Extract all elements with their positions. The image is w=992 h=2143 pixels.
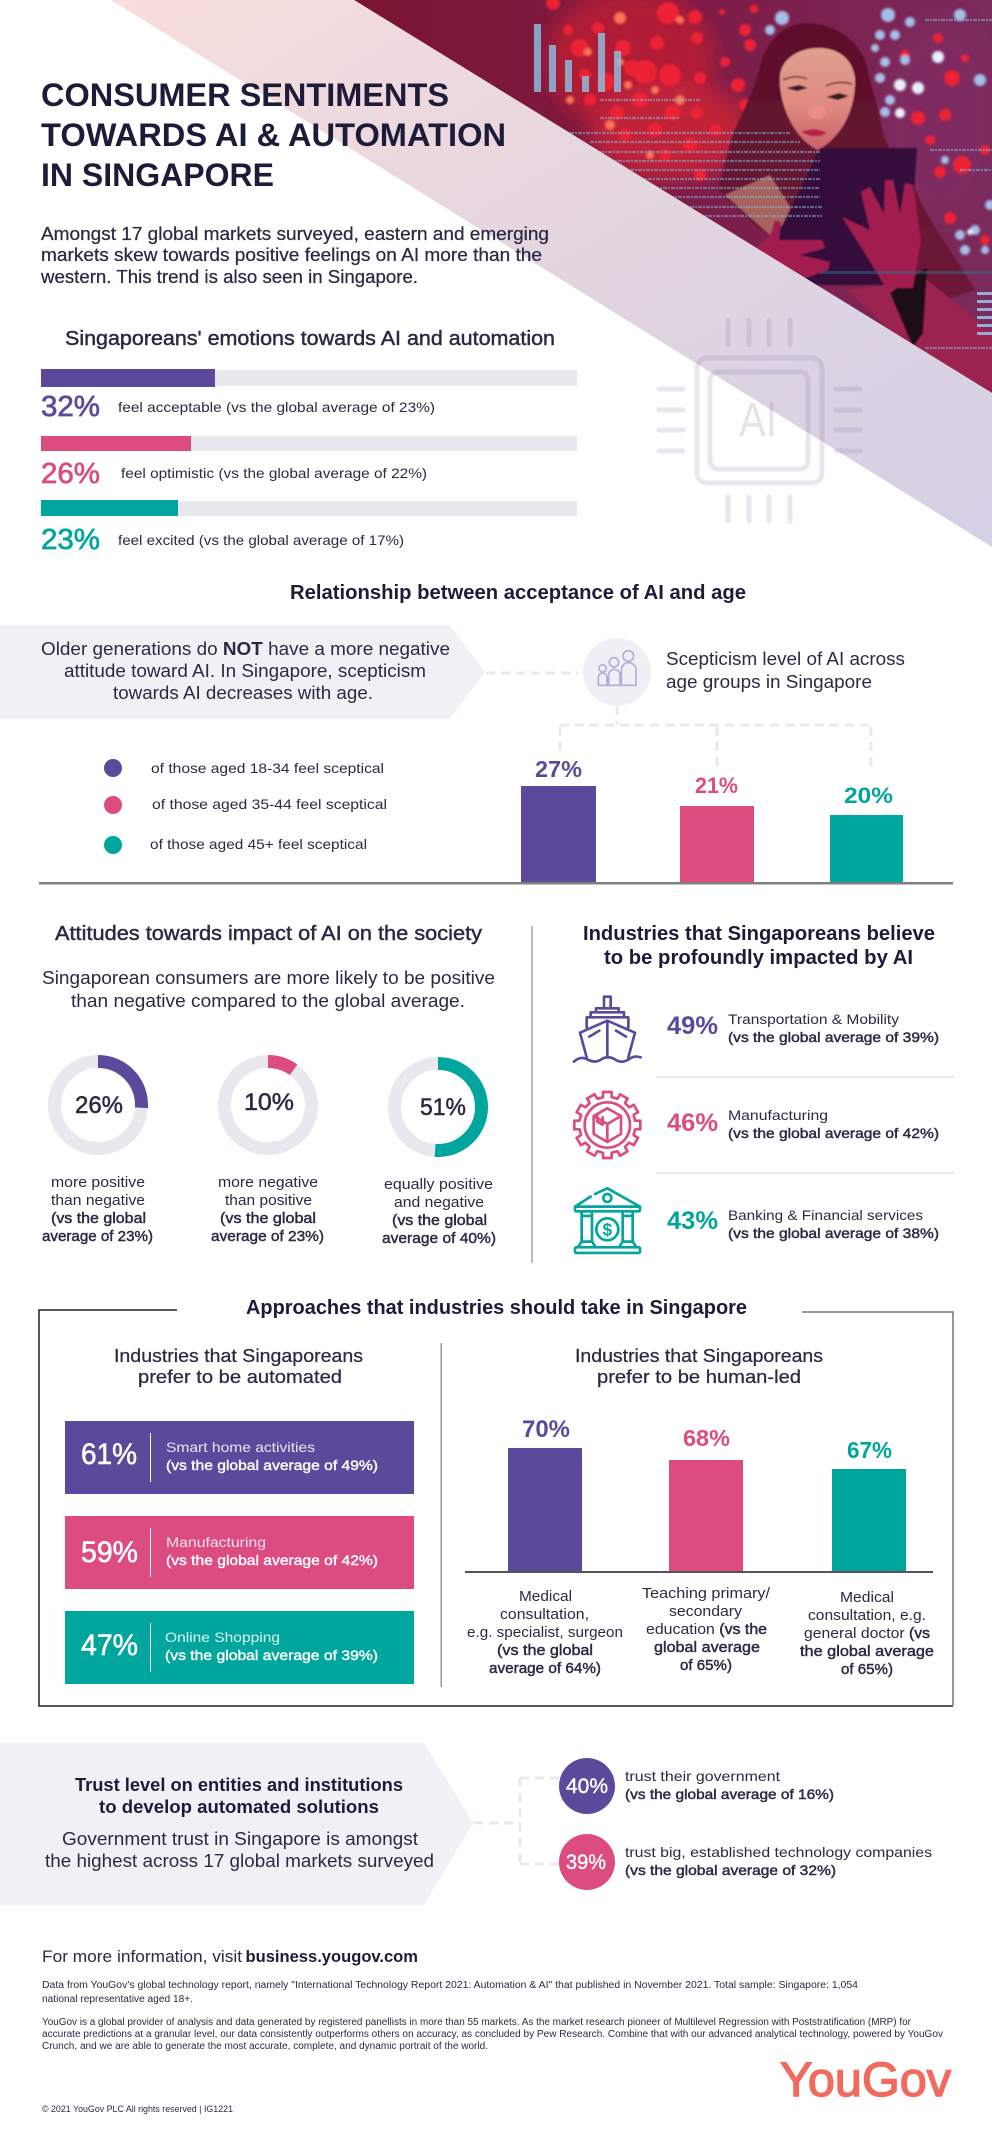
stat: trust tech companies 39%: trust big, established technology companies [625,1844,932,1860]
bar chart: scepticism by age: 20% [844,783,893,808]
donut: 51% equally positive and negative [382,1064,496,1247]
woman: hair [718,23,975,300]
stat: manufacturing 46%: Manufacturing [728,1107,828,1123]
panel: older generations callout arrow: towards AI decreases with age. [113,683,373,703]
woman: face [780,48,855,150]
card: online shopping 47%: Online Shopping [165,1629,280,1645]
donut: 26% more positive: average of 23%) [42,1228,153,1245]
heading: attitudes: Attitudes towards impact of AI on the society [55,923,482,945]
caption: teaching: of 65%) [680,1657,732,1674]
caption: general doctor [800,1589,934,1678]
text: data source notes: accurate predictions at a granular level, our data consistently outperforms others on accuracy, as concluded by Pew Research. Combine that with our advanced analytical technology, powered by YouGov [42,2029,943,2040]
panel: trust level callout arrow: Trust level on entities and institutions [75,1775,403,1795]
card: online shopping 47% [65,1611,414,1684]
stat: trust tech companies 39%: 39% [566,1851,606,1874]
caption: medical specialist [467,1588,623,1677]
caption: teaching: Teaching primary/ [642,1585,771,1602]
text: data source notes: Crunch, and we are able to generate the most accurate, complete, and dynamic portrait of the world. [42,2041,488,2052]
card: manufacturing 59%: 59% [81,1536,138,1569]
text: scepticism level heading: age groups in Singapore [666,672,872,692]
bar: excited 23%: feel excited (vs the global average of 17%) [118,532,404,548]
text: data source notes [42,1980,943,2052]
text: data source notes: Data from YouGov's global technology report, namely "International Technology Report 2021: Automation & AI" that published in November 2021. Total sample: Singapore: 1,054 [42,1980,858,1991]
stat: trust government 40% [559,1758,834,1814]
caption: general doctor: the global average [800,1643,934,1660]
text: more information link: business.yougov.com [246,1947,418,1966]
heading: human-led: Industries that Singaporeans [575,1346,823,1366]
donut: 10% more negative: than positive [225,1192,312,1209]
donut: 51% equally positive and negative: 51% [420,1094,466,1121]
bar chart: human-led industries [465,1416,933,1573]
text: attitudes description [42,968,495,1011]
intro text block [40,224,549,287]
card: smart home 61%: Smart home activities [166,1439,315,1455]
stat: manufacturing 46%: 46% [667,1109,718,1137]
stat: manufacturing 46%: (vs the global average of 42%) [728,1125,939,1141]
photo: woman with tablet and bokeh lights [354,0,992,393]
panel: trust level callout arrow: to develop automated solutions [99,1797,379,1817]
icon: AI chip watermark [659,320,860,521]
stat: manufacturing 46% [667,1107,939,1141]
donut: 26% more positive: than negative [51,1192,145,1209]
heading: automated [114,1346,363,1387]
stat: banking 43% [667,1207,939,1241]
legend: age groups: of those aged 35-44 feel sceptical [152,796,387,812]
caption: medical specialist: consultation, [500,1606,589,1623]
tablet [775,148,917,285]
woman: jacket [847,280,992,393]
caption: medical specialist: Medical [519,1588,572,1605]
heading: industries impacted: to be profoundly impacted by AI [604,947,913,969]
legend: age groups: of those aged 45+ feel sceptical [150,836,367,852]
caption: teaching: secondary [669,1603,743,1620]
legend: age groups: of those aged 18-34 feel sceptical [151,760,384,776]
heading: relationship between acceptance and age: Relationship between acceptance of AI and age [290,582,746,604]
text: scepticism level heading: Scepticism level of AI across [666,649,905,669]
bar: excited 23% [41,500,577,556]
bar: acceptable 32% [41,369,577,423]
caption: general doctor: consultation, e.g. [808,1607,926,1624]
caption: general doctor: general doctor (vs [804,1625,930,1642]
stat: trust government 40%: (vs the global average of 16%) [625,1786,834,1802]
donut: 10% more negative: more negative [218,1174,318,1191]
caption: general doctor: of 65%) [841,1661,893,1678]
donut: 10% more negative: 10% [244,1089,294,1116]
panel: attitudes towards impact of AI [42,923,496,1247]
donut: 26% more positive [42,1062,153,1245]
bar chart: human-led industries: 67% [847,1437,892,1463]
card: online shopping 47%: (vs the global average of 39%) [165,1647,378,1663]
donut: 51% equally positive and negative: (vs the global [392,1212,487,1229]
donut: 51% equally positive and negative: average of 40%) [382,1230,496,1247]
panel: older generations callout arrow: Older generations do NOT have a more negative [41,639,450,659]
panel: trust level callout arrow [0,1743,473,1905]
heading: industries impacted: Industries that Singaporeans believe [583,923,935,945]
data text overlay lines [570,20,992,348]
heading: automated: Industries that Singaporeans [114,1346,363,1366]
card: online shopping 47%: 47% [81,1629,138,1662]
legend: age groups [104,759,387,854]
heading: industries impacted [583,923,935,969]
chart overlay bars [534,24,621,92]
panel: older generations callout arrow: attitude toward AI. In Singapore, scepticism [64,661,426,681]
panel: older generations callout arrow [0,625,485,719]
stat: transportation 49%: Transportation & Mobility [728,1011,899,1027]
caption: teaching: education (vs the [646,1621,767,1638]
caption: medical specialist: e.g. specialist, surgeon [467,1624,623,1641]
stat: trust tech companies 39%: (vs the global average of 32%) [625,1862,836,1878]
logo: YouGov: YouGov [780,2054,951,2107]
donut: 10% more negative [211,1062,324,1245]
text: copyright: © 2021 YouGov PLC All rights reserved | IG1221 [42,2104,233,2115]
bar chart: scepticism by age: 27% [535,756,582,782]
text: data source notes: YouGov is a global provider of analysis and data generated by registered panellists in more than 55 markets. As the market research pioneer of Multilevel Regression with Poststratification (MRP) for [42,2017,912,2028]
panel: prefer to be human-led [465,1346,934,1678]
text: more information link: For more information, visit [42,1947,242,1966]
woman: light hair section [725,175,795,235]
donut: 51% equally positive and negative: equally positive [384,1176,493,1193]
stat: banking 43%: 43% [667,1207,718,1235]
heading: human-led: prefer to be human-led [597,1367,801,1387]
panel: emotions towards AI [41,328,577,556]
intro text block: western. This trend is also seen in Singapore. [40,267,418,287]
intro text block: Amongst 17 global markets surveyed, eastern and emerging [41,224,549,244]
card: smart home 61%: 61% [81,1438,137,1471]
donut: 26% more positive: 26% [75,1092,123,1119]
text: attitudes description: than negative compared to the global average. [71,991,465,1011]
caption: medical specialist: average of 64%) [489,1660,601,1677]
card: manufacturing 59% [65,1516,414,1589]
icon: AI chip watermark: AI [739,394,777,447]
icon: gear with box [574,1092,640,1158]
donut: 26% more positive: more positive [51,1174,145,1191]
heading: automated: prefer to be automated [138,1367,342,1387]
icon: ship [574,997,641,1062]
panel: trust level callout arrow: Government trust in Singapore is amongst [62,1829,418,1849]
bar: acceptable 32%: 32% [41,391,100,423]
stat: banking 43%: (vs the global average of 38%) [728,1225,939,1241]
stat: transportation 49%: 49% [667,1012,718,1040]
bar: excited 23%: 23% [41,524,100,556]
card: manufacturing 59%: (vs the global average of 42%) [166,1552,378,1568]
donut: 51% equally positive and negative: and negative [394,1194,484,1211]
stat: transportation 49%: (vs the global average of 39%) [728,1029,939,1045]
diagonal gradient band [111,0,992,547]
bar chart: human-led industries: 70% [522,1416,570,1443]
arrow: dashed connectors to bars [486,673,871,768]
panel: trust level callout arrow: the highest across 17 global markets surveyed [45,1851,434,1871]
icon: people in circle [583,638,651,706]
text: attitudes description: Singaporean consumers are more likely to be positive [42,968,495,988]
title: CONSUMER SENTIMENTS [41,77,449,113]
panel: prefer to be automated [65,1346,414,1684]
caption: general doctor: Medical [840,1589,894,1606]
heading: approaches: Approaches that industries should take in Singapore [246,1297,747,1319]
caption: teaching: global average [654,1639,760,1656]
woman: hands [842,180,921,288]
caption: teaching [642,1585,771,1674]
stat: banking 43%: Banking & Financial services [728,1207,923,1223]
donut: 26% more positive: (vs the global [51,1210,146,1227]
text: data source notes: national representative aged 18+. [42,1994,193,2005]
stat: transportation 49% [667,1011,939,1045]
heading: human-led [575,1346,823,1387]
title: TOWARDS AI & AUTOMATION [41,117,506,153]
stat: trust government 40%: 40% [566,1775,608,1798]
caption: medical specialist: (vs the global [497,1642,593,1659]
card: smart home 61%: (vs the global average of 49%) [166,1457,378,1473]
bar: optimistic 26% [41,436,577,490]
title: IN SINGAPORE [41,157,274,193]
title [41,77,506,193]
intro text block: markets skew towards positive feelings on AI more than the [41,245,542,265]
heading: emotions: Singaporeans' emotions towards AI and automation [65,328,555,350]
donut: 10% more negative: average of 23%) [211,1228,324,1245]
card: smart home 61% [65,1421,414,1494]
stat: trust government 40%: trust their government [625,1768,780,1784]
card: manufacturing 59%: Manufacturing [166,1534,266,1550]
bar: optimistic 26%: feel optimistic (vs the global average of 22%) [121,465,427,481]
arrow: dashed connectors to trust circles [474,1778,559,1864]
bar chart: scepticism by age [39,756,953,884]
text: scepticism level heading [666,649,905,692]
bar: acceptable 32%: feel acceptable (vs the global average of 23%) [118,399,435,415]
bar chart: human-led industries: 68% [683,1425,730,1451]
stat: trust tech companies 39% [559,1834,932,1890]
donut: 10% more negative: (vs the global [220,1210,316,1227]
icon: bank [575,1188,640,1253]
panel: approaches frame [39,1310,953,1706]
panel: industries profoundly impacted [574,923,954,1253]
icon: bank: $ [603,1219,613,1239]
bar chart: scepticism by age: 21% [695,773,738,798]
bar: optimistic 26%: 26% [41,458,100,490]
text: more information link [42,1947,418,1966]
